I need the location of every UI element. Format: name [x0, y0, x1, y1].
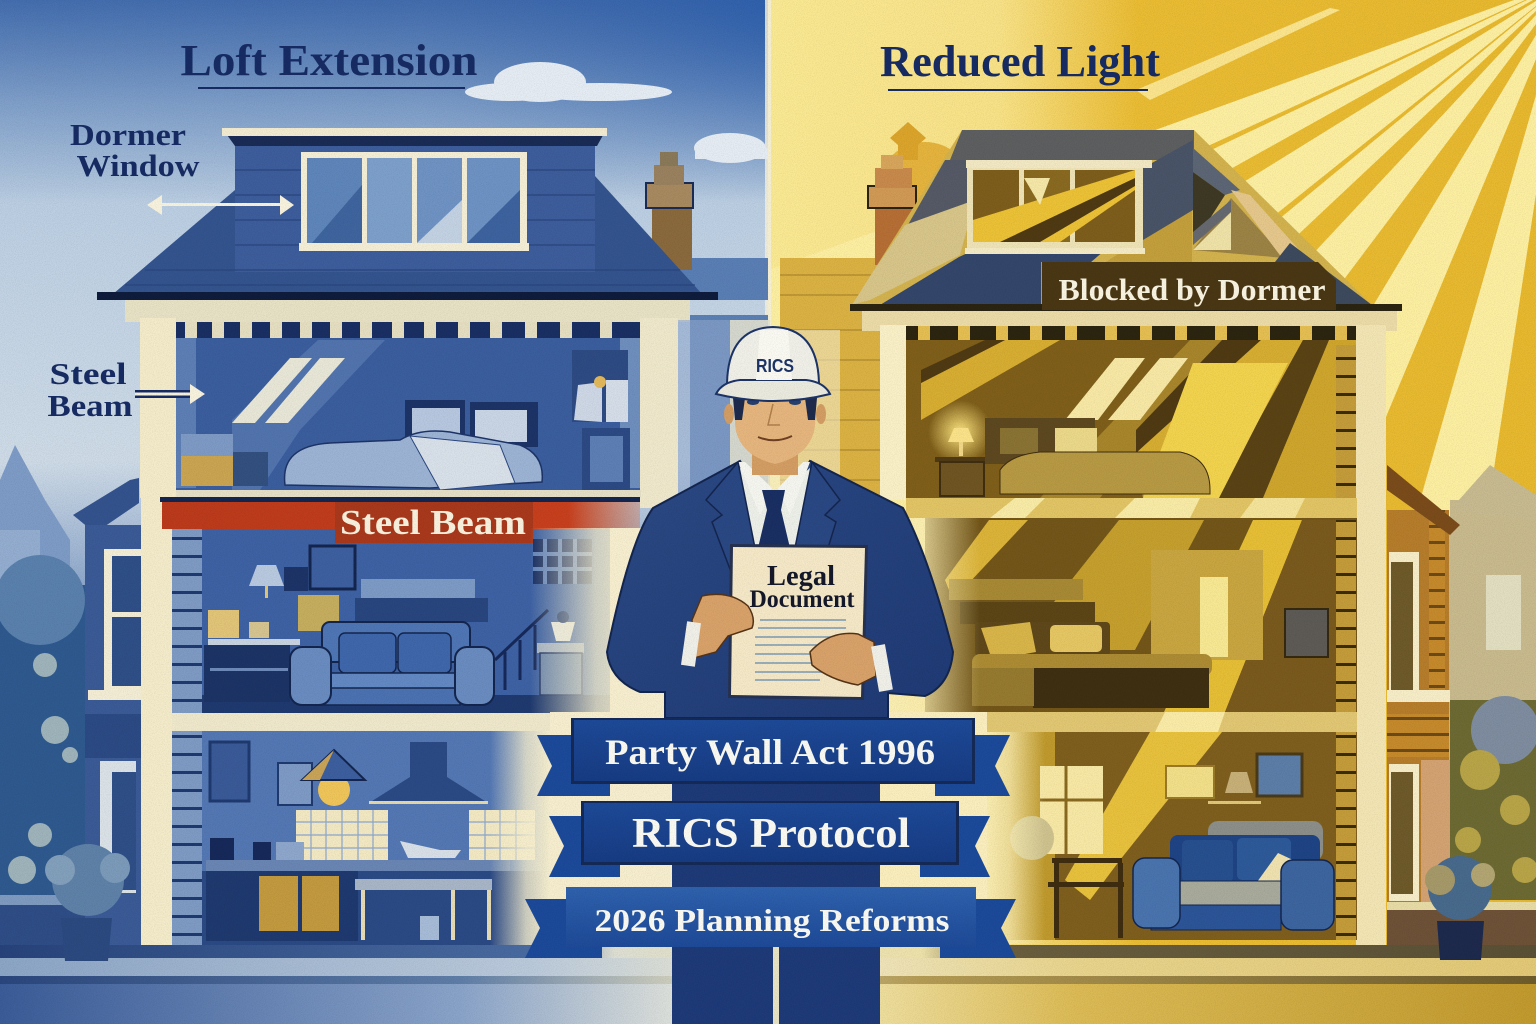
label: steel beam: Steel	[50, 356, 127, 391]
steel beam: Steel Beam	[340, 503, 526, 542]
left back wall of right house	[770, 258, 880, 520]
sofa	[290, 622, 494, 705]
head	[724, 395, 826, 475]
left house roof	[97, 128, 718, 300]
right neighbouring house and trees	[1387, 465, 1536, 958]
house wall structure right	[862, 311, 1397, 950]
trousers	[672, 716, 880, 1024]
panel: right lower room	[996, 732, 1357, 940]
blue sofa	[1133, 821, 1334, 930]
banner: rics protocol: RICS Protocol	[632, 811, 910, 857]
skylight	[1065, 358, 1188, 420]
panel: kitchen	[172, 731, 542, 945]
headboard art	[355, 579, 488, 622]
label: dormer window	[70, 117, 200, 183]
right dormer window	[965, 160, 1152, 254]
suit jacket	[607, 461, 953, 718]
house wall structure left	[125, 300, 690, 950]
cabinet and lamp	[572, 350, 630, 490]
title: loft extension: Loft Extension	[180, 36, 478, 85]
skylight	[232, 358, 345, 423]
icon: hard hat	[716, 327, 830, 401]
upstairs window	[533, 539, 592, 584]
lapels	[706, 462, 840, 600]
left neighbouring house and trees	[0, 445, 155, 957]
lamp and side table	[928, 400, 992, 496]
center fade over left house	[490, 320, 770, 962]
banner: rics protocol	[549, 801, 990, 877]
panel: living room	[172, 528, 618, 713]
center divider	[765, 0, 771, 330]
surveyor figure	[607, 327, 953, 1024]
chair and plant	[1010, 816, 1124, 938]
label: steel beam: Beam	[48, 388, 133, 423]
right side wing	[1387, 465, 1460, 902]
tie	[758, 490, 790, 548]
cloud	[465, 62, 768, 163]
icon: right potted plant	[1425, 856, 1495, 960]
bedside chest	[181, 434, 268, 486]
extractor hood	[369, 742, 488, 804]
wall frames and lamp	[1166, 754, 1302, 804]
legal document	[728, 544, 868, 700]
shirt collar	[738, 462, 812, 545]
panel: loft bedroom	[176, 338, 640, 490]
pendant lamp	[302, 750, 365, 806]
wall lamp and pictures	[249, 546, 355, 631]
center fade over right house	[775, 518, 1045, 952]
stairs and side table	[495, 610, 584, 695]
steel beam	[160, 490, 641, 543]
panel: right yellow background with sun rays	[768, 0, 1536, 1024]
icon: right chimney	[868, 122, 967, 265]
label: dormer window: Window	[76, 148, 200, 183]
left side wing	[73, 478, 141, 945]
arrow: steel beam	[135, 384, 205, 404]
tiles	[296, 810, 535, 860]
icon: left chimney	[646, 152, 693, 270]
floor slab left	[172, 713, 612, 731]
panel: left blue background	[0, 0, 768, 899]
bed	[985, 418, 1210, 494]
callout: blocked by dormer	[1042, 262, 1336, 310]
panel: right loft bedroom	[906, 340, 1356, 498]
banner: 2026 planning reforms	[525, 887, 1016, 958]
icon: hard hat: RICS	[756, 356, 794, 376]
icon: left potted plant	[45, 844, 130, 961]
panel: right middle room	[925, 518, 1357, 712]
legal document: Legal	[767, 560, 835, 592]
right house roof	[850, 130, 1402, 311]
desk	[204, 610, 300, 702]
banner: 2026 planning reforms: 2026 Planning Reforms	[594, 902, 950, 938]
bed	[285, 400, 542, 490]
counter and cabinets	[206, 838, 510, 941]
label: dormer window: Dormer	[70, 117, 186, 152]
ground strips	[0, 945, 1536, 1024]
legal document: Document	[750, 586, 855, 613]
label: steel beam	[48, 356, 133, 423]
hands	[681, 594, 893, 692]
left back roof and wall	[640, 258, 768, 535]
window	[1040, 766, 1103, 854]
floor slab right lower	[930, 712, 1357, 732]
bed	[972, 622, 1212, 708]
callout: blocked by dormer: Blocked by Dormer	[1058, 272, 1326, 307]
banner: party wall act 1996: Party Wall Act 1996	[605, 732, 935, 772]
dormer window	[299, 152, 529, 251]
floor slab right upper	[906, 498, 1357, 518]
arrow: dormer window	[147, 195, 294, 215]
table	[355, 879, 492, 940]
banner: party wall act 1996	[537, 718, 1010, 796]
title: reduced light: Reduced Light	[880, 37, 1160, 86]
